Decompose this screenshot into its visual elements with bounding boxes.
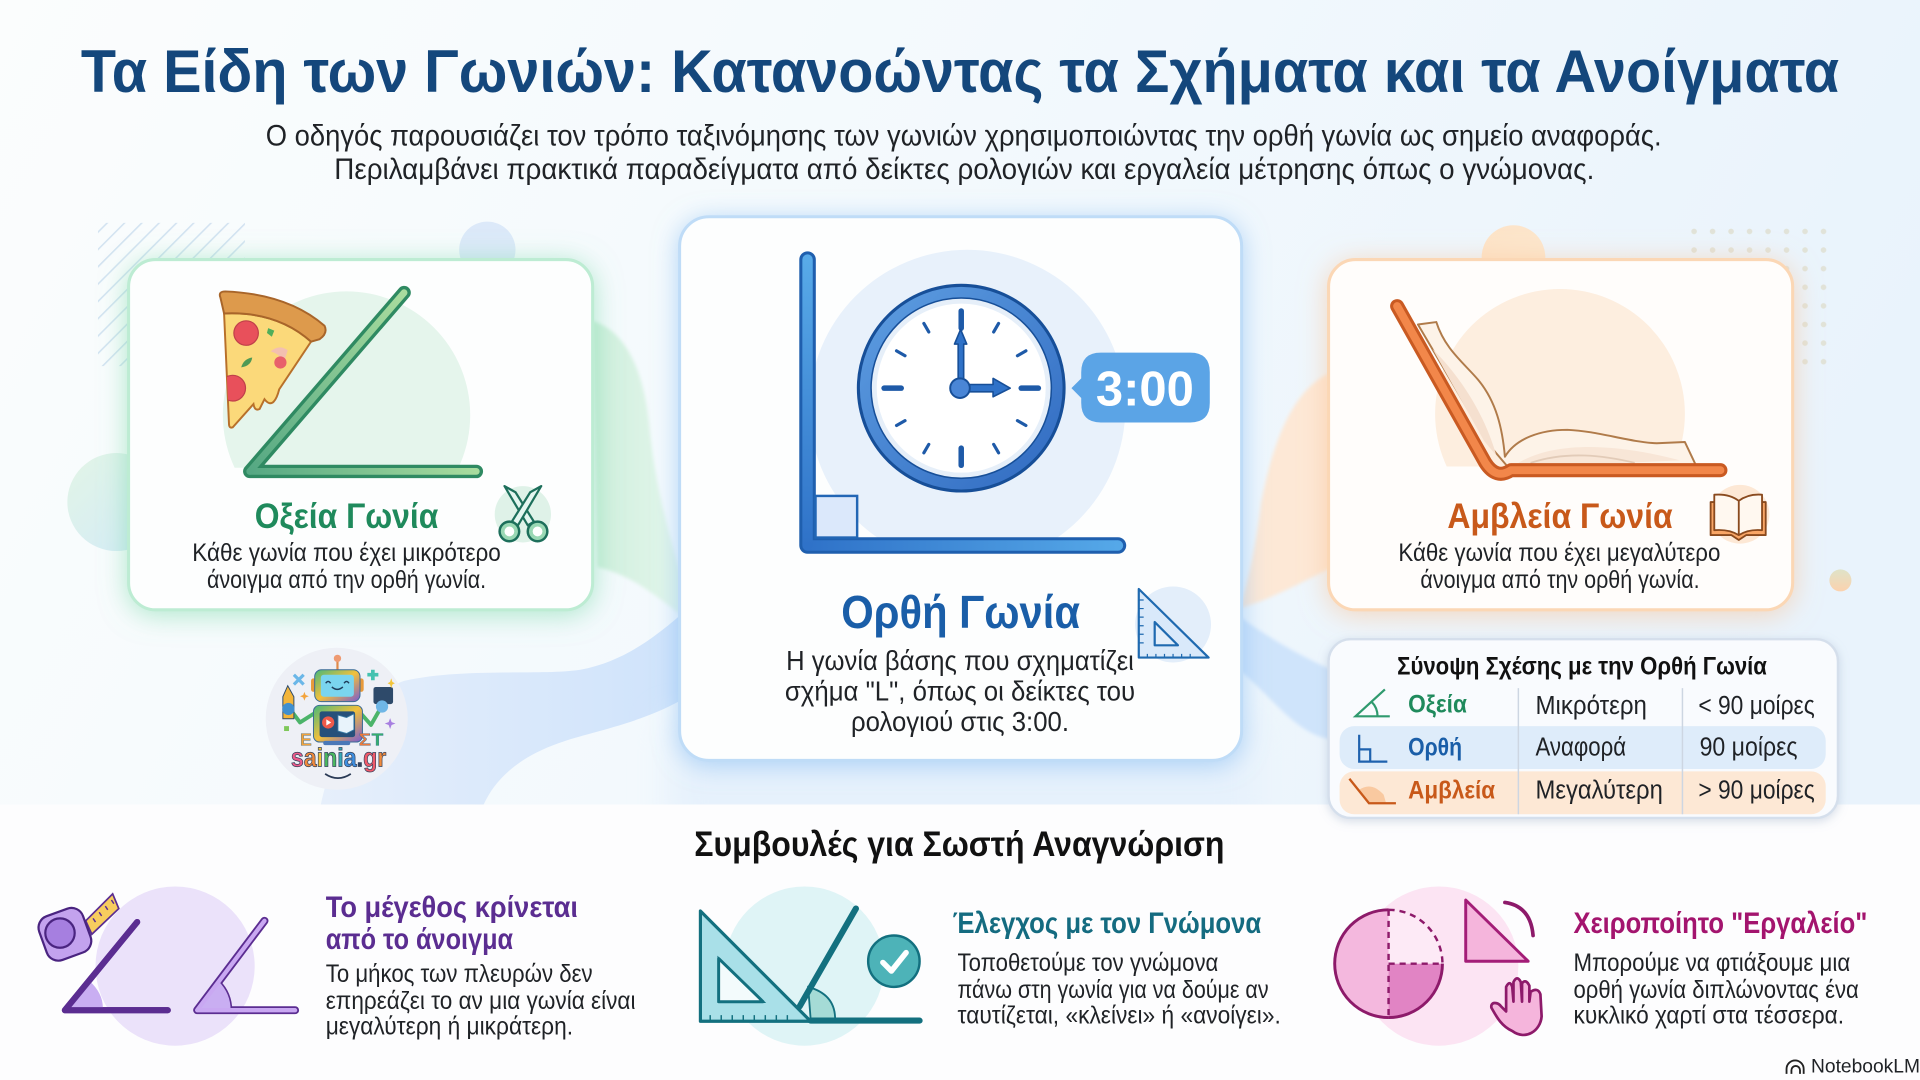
tip text: μεγαλύτερη ή μικράτερη. [326,1013,573,1041]
row: obtuse: > 90 μοίρες [1698,776,1815,804]
tip: handmade tool [1335,887,1867,1046]
logo: sainia.gr robot [266,648,408,790]
tip heading: Έλεγχος με τον Γνώμονα [953,907,1262,940]
tip text [958,949,1281,1030]
callout: 3:00 [1071,353,1210,422]
tip: check with set square [700,887,1281,1046]
text: right description: Η γωνία βάσης που σχηματίζει [786,645,1134,676]
row: right: Αναφορά [1536,734,1626,762]
icon: pizza slice [220,291,326,428]
row: right: Ορθή [1408,734,1462,762]
table title: Σύνοψη Σχέσης με την Ορθή Γωνία [1397,653,1767,681]
row: acute: Οξεία [1408,691,1467,719]
row: obtuse: Αμβλεία [1408,776,1496,804]
acute angle shape [250,293,476,471]
panel: acute angle [129,260,593,610]
tip: size depends on opening [35,887,636,1046]
panel: right angle [680,217,1242,760]
right angle shape [808,260,1118,546]
row: acute [1356,689,1815,720]
row: right [1359,734,1798,762]
tip text: ταυτίζεται, «κλείνει» ή «ανοίγει». [958,1002,1281,1030]
row: obtuse: Μεγαλύτερη [1536,776,1663,804]
text: obtuse description: Κάθε γωνία που έχει μεγαλύτερο [1398,539,1720,567]
tip text: Το μήκος των πλευρών δεν [326,960,593,988]
text: obtuse description: άνοιγμα από την ορθή γωνία. [1420,566,1700,594]
tip text: ορθή γωνία διπλώνοντας ένα [1573,976,1859,1004]
bottom white band [0,804,1920,1080]
row: obtuse [1349,776,1815,804]
logo: sainia.gr robot: Ε [300,730,312,750]
icon: scissors [495,486,551,542]
watermark: NotebookLM: NotebookLM [1811,1057,1920,1078]
row: acute: Μικρότερη [1536,692,1647,720]
heading: right: Ορθή Γωνία [841,586,1080,638]
tip text: πάνω στη γωνία για να δούμε αν [958,976,1269,1004]
text: right description: σχήμα "L", όπως οι δείκτες του [785,675,1135,706]
row: right: 90 μοίρες [1700,734,1798,762]
text: right description: ρολογιού στις 3:00. [851,706,1069,737]
subtitle: Περιλαμβάνει πρακτικά παραδείγματα από δείκτες ρολογιών και εργαλεία μέτρησης όπως ο γνώμονας. [334,153,1594,186]
heading: acute: Οξεία Γωνία [255,496,439,536]
panel: summary table [1329,639,1838,818]
logo: sainia.gr robot: Σ [359,730,371,750]
tip text [1573,949,1859,1030]
tip text: επηρεάζει το αν μια γωνία είναι [326,987,636,1015]
tip heading: Χειροποίητο "Εργαλείο" [1573,907,1867,940]
callout: 3:00: 3:00 [1096,362,1194,416]
logo: sainia.gr robot: Τ [372,730,384,750]
tip heading: από το άνοιγμα [326,923,514,956]
tip text: κυκλικό χαρτί στα τέσσερα. [1573,1002,1844,1030]
icon: clock [858,285,1064,491]
text: acute description: Κάθε γωνία που έχει μικρότερο [192,539,501,567]
icon: open book angle [1397,306,1720,474]
title: Τα Είδη των Γωνιών: Κατανοώντας τα Σχήματα και τα Ανοίγματα [81,38,1839,105]
subtitle: Ο οδηγός παρουσιάζει τον τρόπο ταξινόμησης των γωνιών χρησιμοποιώντας την ορθή γωνία ως σημείο αναφοράς. [266,120,1662,153]
text: acute description: άνοιγμα από την ορθή γωνία. [207,566,486,594]
tip heading [326,891,578,956]
icon: book [1711,485,1769,544]
section heading: tips: Συμβουλές για Σωστή Αναγνώριση [694,825,1224,864]
panel: obtuse angle [1329,260,1793,610]
heading: obtuse: Αμβλεία Γωνία [1447,496,1673,536]
text: obtuse description [1398,539,1720,594]
tip text: Μπορούμε να φτιάξουμε μια [1573,949,1850,977]
tip text [326,960,636,1041]
tip text: Τοποθετούμε τον γνώμονα [958,949,1218,977]
text: right description [785,645,1135,737]
icon: set square [1135,587,1211,662]
icon: set square with angle [700,887,920,1046]
tip heading: Το μέγεθος κρίνεται [326,891,578,924]
icon: two angles with tape measure [35,887,295,1046]
row: acute: < 90 μοίρες [1698,692,1815,720]
icon: folded paper and hand [1335,887,1542,1046]
text: acute description [192,539,501,594]
logo: sainia.gr robot: sainia.gr [291,745,386,773]
subtitle [266,120,1662,186]
background blobs [67,222,1851,833]
